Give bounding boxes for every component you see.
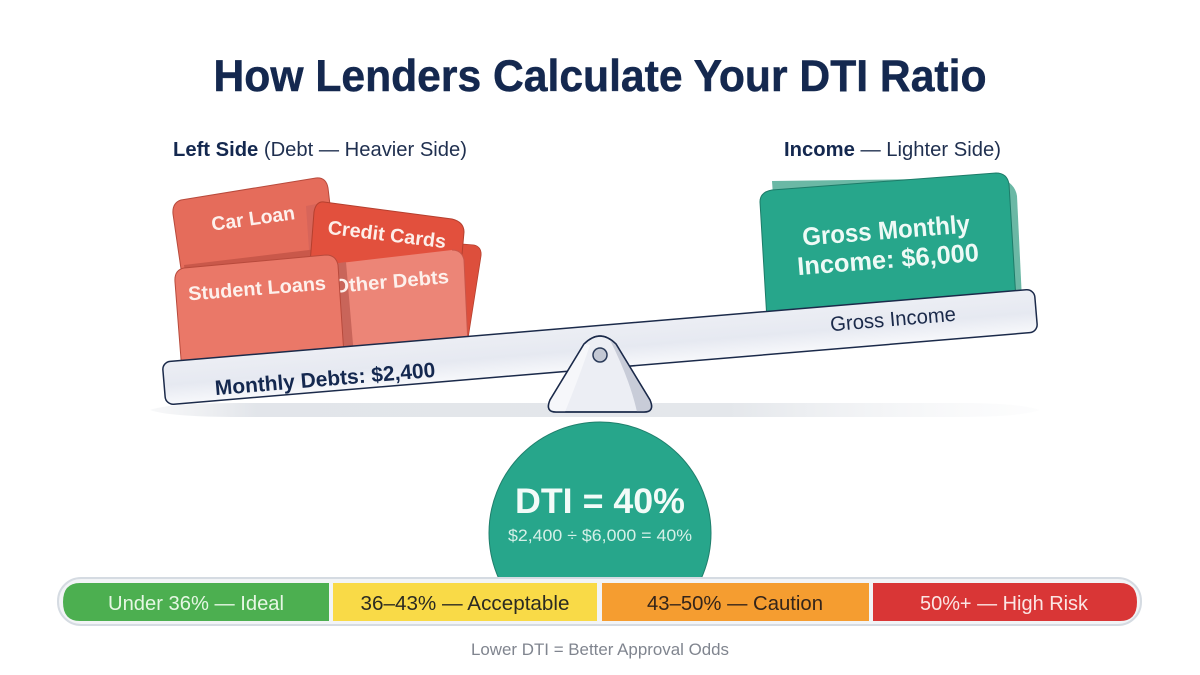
beam label: monthly debts: Monthly Debts: $2,400 bbox=[214, 359, 436, 400]
seesaw beam bbox=[162, 289, 1038, 405]
card: gross monthly income bbox=[760, 173, 1016, 320]
result circle bbox=[488, 422, 712, 577]
segment: high risk: 50%+ — High Risk bbox=[920, 592, 1089, 615]
card: other debts bbox=[332, 250, 468, 358]
risk scale bar bbox=[58, 578, 1141, 625]
right side heading: Income — Lighter Side) bbox=[784, 139, 1001, 161]
card: student loans bbox=[175, 255, 344, 372]
card: credit cards bbox=[308, 202, 464, 300]
card: car loan: Car Loan bbox=[210, 202, 296, 236]
fulcrum bbox=[548, 336, 652, 412]
card: gross monthly income: Income: $6,000 bbox=[796, 239, 980, 281]
card: gross monthly income: Gross Monthly bbox=[801, 210, 972, 252]
result value: DTI = 40% bbox=[515, 481, 685, 521]
debt cards stack bbox=[173, 178, 481, 372]
title: How Lenders Calculate Your DTI Ratio bbox=[214, 52, 986, 101]
left side heading: Left Side (Debt — Heavier Side) bbox=[173, 139, 467, 161]
card: other debts: Other Debts bbox=[332, 266, 450, 298]
segment: ideal bbox=[63, 583, 329, 621]
card overlap shade bbox=[184, 247, 350, 310]
card: back green bbox=[772, 178, 1022, 300]
footnote: Lower DTI = Better Approval Odds bbox=[471, 641, 729, 659]
ground shadow bbox=[150, 403, 1040, 417]
segment: caution: 43–50% — Caution bbox=[647, 592, 823, 615]
card: car loan bbox=[173, 178, 340, 310]
segment: acceptable bbox=[333, 583, 597, 621]
card: credit cards: Credit Cards bbox=[326, 217, 447, 253]
segment: ideal: Under 36% — Ideal bbox=[108, 592, 284, 615]
segment: caution bbox=[602, 583, 869, 621]
pivot bbox=[593, 348, 607, 362]
result formula: $2,400 ÷ $6,000 = 40% bbox=[508, 526, 692, 545]
beam label: gross income: Gross Income bbox=[829, 303, 957, 336]
card: back red sliver bbox=[440, 244, 481, 345]
card: student loans: Student Loans bbox=[187, 273, 327, 305]
segment: high risk bbox=[873, 583, 1137, 621]
income card stack bbox=[760, 173, 1022, 320]
segment: acceptable: 36–43% — Acceptable bbox=[360, 592, 570, 615]
